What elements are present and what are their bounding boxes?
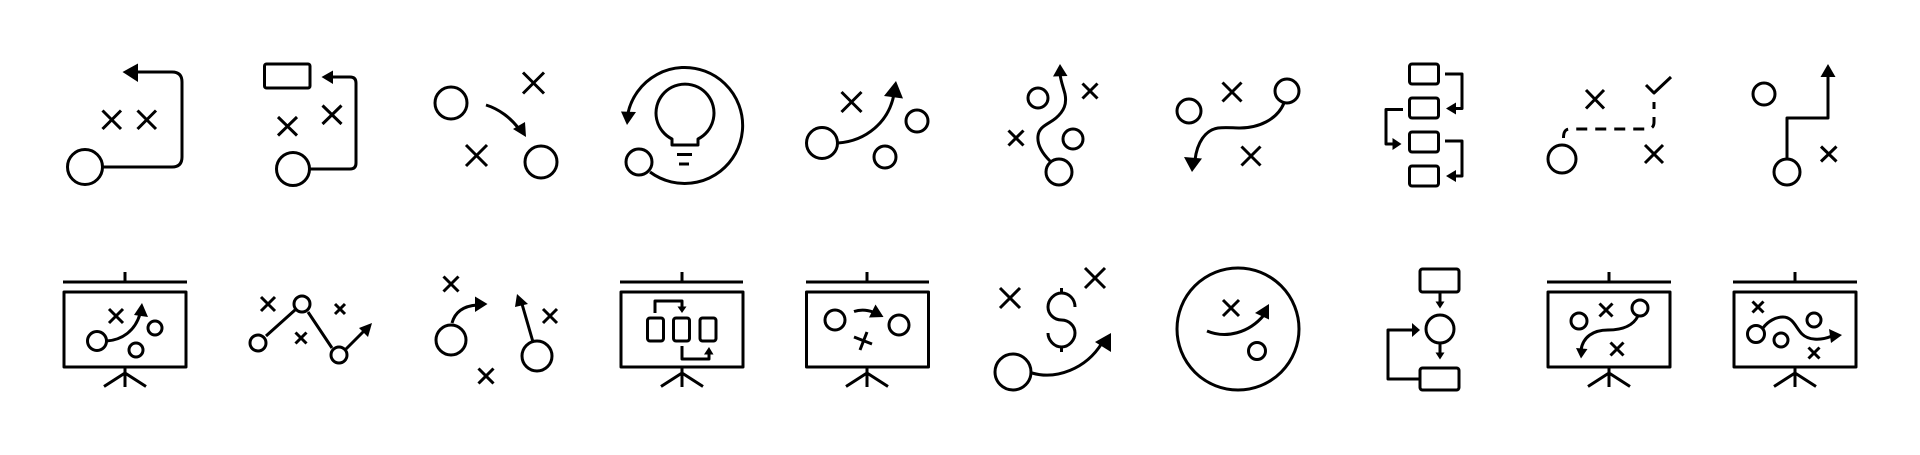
icon: presentation board with flow boxes (620, 272, 743, 387)
icon: dashed route to check mark (1548, 77, 1671, 173)
icon: S-curve arrow downward with circles and crosses (1177, 79, 1299, 172)
icon: four step flow chart (1386, 64, 1462, 186)
icon: presentation board with wavy play (1733, 272, 1857, 387)
icon: presentation board with curved arrow play (63, 272, 187, 387)
icon: light bulb circled by an arrow (621, 67, 743, 183)
icon: two circles, two crosses and curved arrow (435, 72, 557, 178)
icon: play with curved arrow between circles (806, 81, 928, 168)
icon: circle routed to rectangle with two crosses (264, 64, 356, 186)
icon: stepped arrow upward (1753, 64, 1836, 185)
icon: flow chart with boxes and circle (1388, 269, 1459, 390)
icon: presentation board with S-curve play (1547, 272, 1671, 387)
icon: two circles with arrows and crosses (436, 276, 557, 384)
icon: presentation board with play between two circles (806, 272, 929, 387)
icon: dollar with curved arrow and crosses (995, 268, 1111, 390)
icon: zigzag route through three circles (250, 296, 372, 363)
icon: wavy upward arrow with circles and crosses (1008, 64, 1098, 185)
icon: play from circle turning back with two crosses (68, 64, 182, 184)
icon: play inside a large circle (1177, 268, 1299, 390)
